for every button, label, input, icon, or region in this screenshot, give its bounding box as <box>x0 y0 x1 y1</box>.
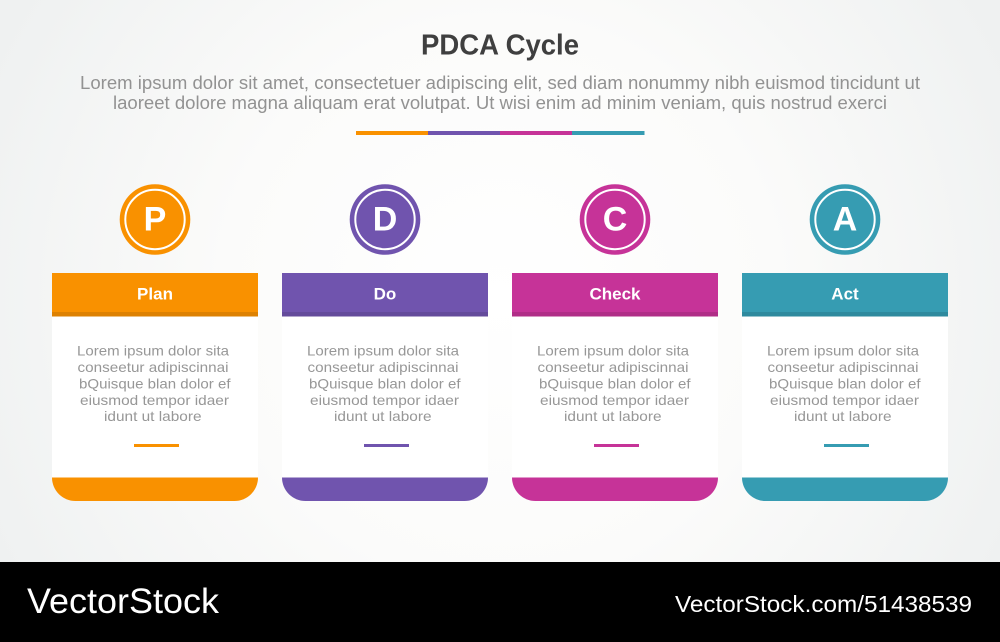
act footer band <box>742 478 948 501</box>
check text block: bQuisque blan dolor ef <box>539 376 691 392</box>
plan text block: Lorem ipsum dolor sita <box>77 342 229 358</box>
check footer band <box>512 478 718 501</box>
check text block <box>537 342 691 424</box>
act text block <box>767 342 921 424</box>
plan footer band <box>52 478 258 501</box>
do text block: eiusmod tempor idaer <box>310 392 459 408</box>
act heading bar <box>742 273 948 316</box>
icon: do circle D: D <box>373 200 397 238</box>
icon: do circle D <box>350 184 420 255</box>
check accent line <box>594 444 639 447</box>
watermark footer bar: VectorStock.com/51438539 <box>675 591 972 617</box>
act text block: Lorem ipsum dolor sita <box>767 342 919 358</box>
icon: check circle C: C <box>603 200 627 238</box>
panel: plan <box>52 184 258 501</box>
icon: act circle A <box>810 184 880 255</box>
panel: do <box>282 184 488 501</box>
title: PDCA Cycle <box>421 30 579 62</box>
check text block: Lorem ipsum dolor sita <box>537 342 689 358</box>
check heading bar: Check <box>589 284 641 304</box>
check text block: eiusmod tempor idaer <box>540 392 689 408</box>
act text block: idunt ut labore <box>794 408 892 424</box>
check card body <box>512 316 718 478</box>
plan heading bar: Plan <box>137 284 173 304</box>
plan text block: bQuisque blan dolor ef <box>79 376 231 392</box>
act text block: bQuisque blan dolor ef <box>769 376 921 392</box>
plan card body <box>52 316 258 478</box>
do text block: idunt ut labore <box>334 408 432 424</box>
icon: check circle C <box>580 184 650 255</box>
do card body <box>282 316 488 478</box>
do text block: bQuisque blan dolor ef <box>309 376 461 392</box>
plan text block <box>77 342 231 424</box>
do accent line <box>364 444 409 447</box>
check heading bar <box>512 273 718 316</box>
act text block: eiusmod tempor idaer <box>770 392 919 408</box>
icon: plan circle P: P <box>144 200 166 238</box>
icon: plan circle P <box>120 184 190 255</box>
watermark footer bar <box>0 562 1000 642</box>
do text block: conseetur adipiscinnai <box>308 359 458 375</box>
act heading bar: Act <box>831 284 859 304</box>
act text block: conseetur adipiscinnai <box>768 359 918 375</box>
panel: act <box>742 184 948 501</box>
subtitle text block <box>80 73 920 113</box>
plan heading bar <box>52 273 258 316</box>
do heading bar <box>282 273 488 316</box>
check text block: idunt ut labore <box>564 408 662 424</box>
act card body <box>742 316 948 478</box>
panel: check <box>512 184 718 501</box>
four colour title divider <box>356 131 644 135</box>
icon: act circle A: A <box>833 200 857 238</box>
subtitle text block: Lorem ipsum dolor sit amet, consectetuer adipiscing elit, sed diam nonummy nibh euismod tincidunt ut <box>80 73 920 93</box>
plan text block: conseetur adipiscinnai <box>78 359 228 375</box>
watermark footer bar: VectorStock <box>27 582 220 621</box>
check text block: conseetur adipiscinnai <box>538 359 688 375</box>
subtitle text block: laoreet dolore magna aliquam erat volutpat. Ut wisi enim ad minim veniam, quis nostrud exerci <box>113 93 887 113</box>
do text block <box>307 342 461 424</box>
plan text block: eiusmod tempor idaer <box>80 392 229 408</box>
plan text block: idunt ut labore <box>104 408 202 424</box>
act accent line <box>824 444 869 447</box>
do footer band <box>282 478 488 501</box>
do heading bar: Do <box>374 284 396 304</box>
do text block: Lorem ipsum dolor sita <box>307 342 459 358</box>
plan accent line <box>134 444 179 447</box>
